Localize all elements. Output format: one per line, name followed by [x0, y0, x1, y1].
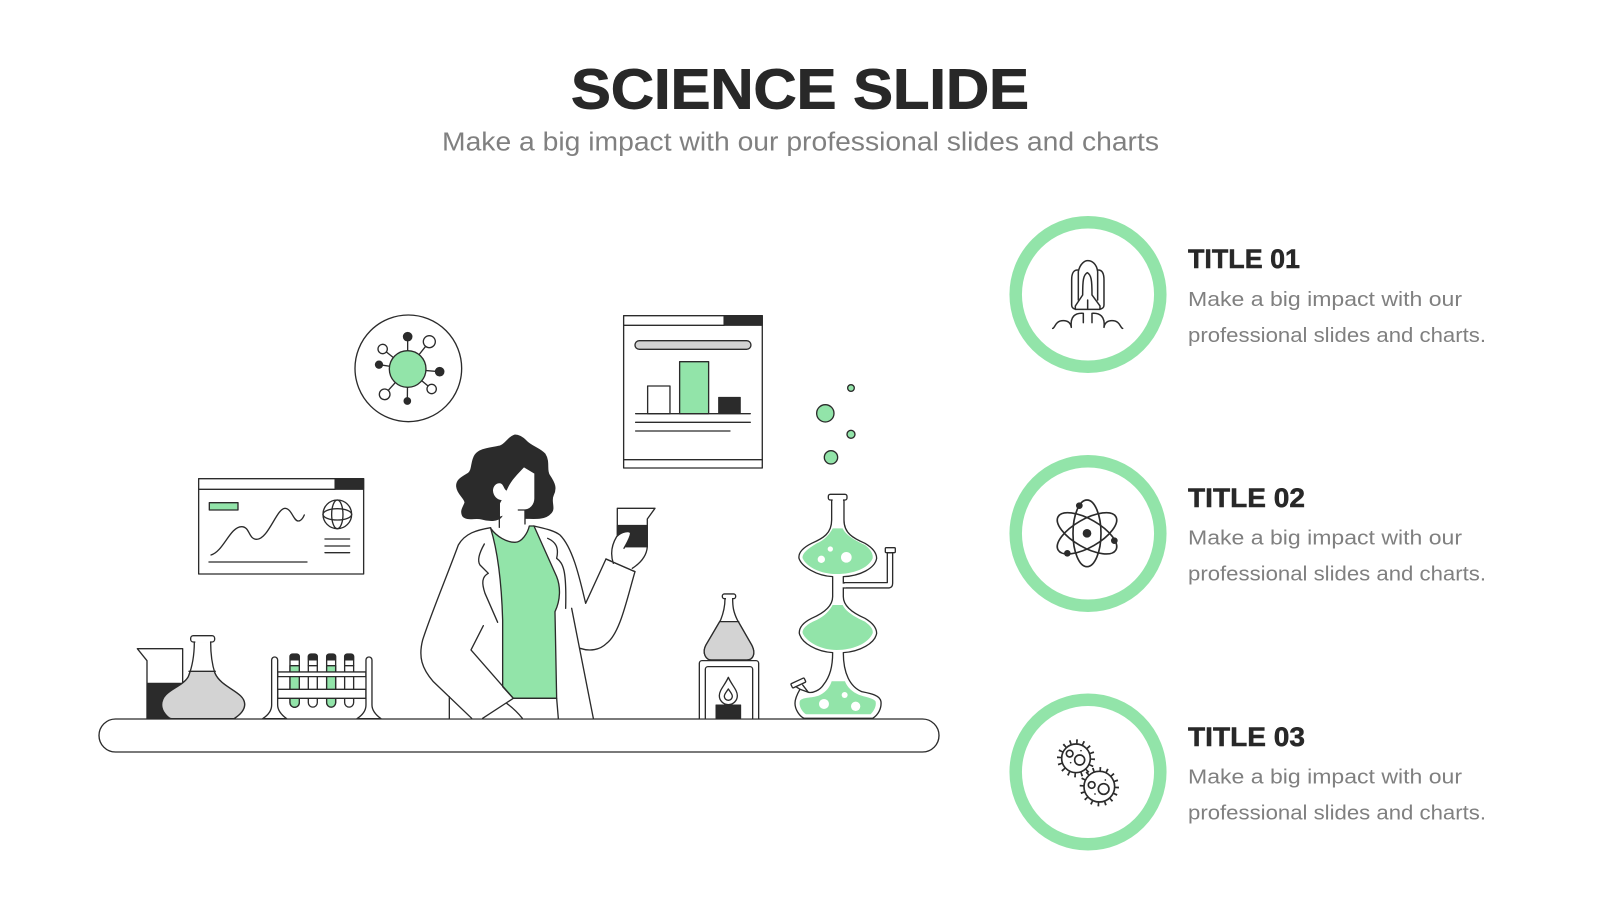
ring 01 — [1016, 222, 1160, 367]
neck and face — [491, 500, 529, 542]
title: SCIENCE SLIDE — [571, 58, 1029, 122]
shirt — [491, 526, 559, 698]
title 02: TITLE 02 — [1188, 483, 1305, 513]
description 01: professional slides and charts. — [1188, 324, 1486, 347]
ring 03 — [1016, 700, 1160, 844]
description 02: Make a big impact with our — [1188, 526, 1462, 550]
description 03: professional slides and charts. — [1188, 802, 1486, 824]
beaker and round flask — [137, 636, 245, 719]
description 03: Make a big impact with our — [1188, 766, 1462, 788]
description 01: Make a big impact with our — [1188, 288, 1462, 311]
bubbles — [817, 385, 855, 464]
test tube rack — [263, 654, 381, 719]
icon: rocket — [1053, 261, 1123, 328]
scientist — [421, 435, 655, 718]
title 03: TITLE 03 — [1188, 722, 1305, 752]
table — [99, 719, 939, 752]
hand — [606, 532, 647, 572]
title 01: TITLE 01 — [1188, 244, 1300, 274]
item 02 — [1016, 461, 1486, 606]
bar chart window — [624, 316, 762, 468]
burner with small flask — [699, 594, 759, 718]
subtitle: Make a big impact with our professional slides and charts — [442, 128, 1159, 156]
handheld beaker — [617, 508, 655, 547]
hair — [457, 435, 555, 520]
chart window: line chart and globe — [199, 479, 364, 574]
ear — [493, 483, 507, 500]
stacked distillation flask — [791, 494, 895, 718]
ring 02 — [1016, 461, 1160, 606]
icon: atom — [1051, 500, 1123, 567]
virus circle diagram — [355, 315, 462, 422]
coat details — [479, 544, 498, 622]
item 03 — [1016, 700, 1486, 844]
coat — [421, 526, 635, 718]
description 02: professional slides and charts. — [1188, 562, 1486, 586]
icon: bacteria — [1059, 742, 1117, 804]
item 01 — [1016, 222, 1486, 367]
laboratory illustration — [99, 315, 939, 752]
